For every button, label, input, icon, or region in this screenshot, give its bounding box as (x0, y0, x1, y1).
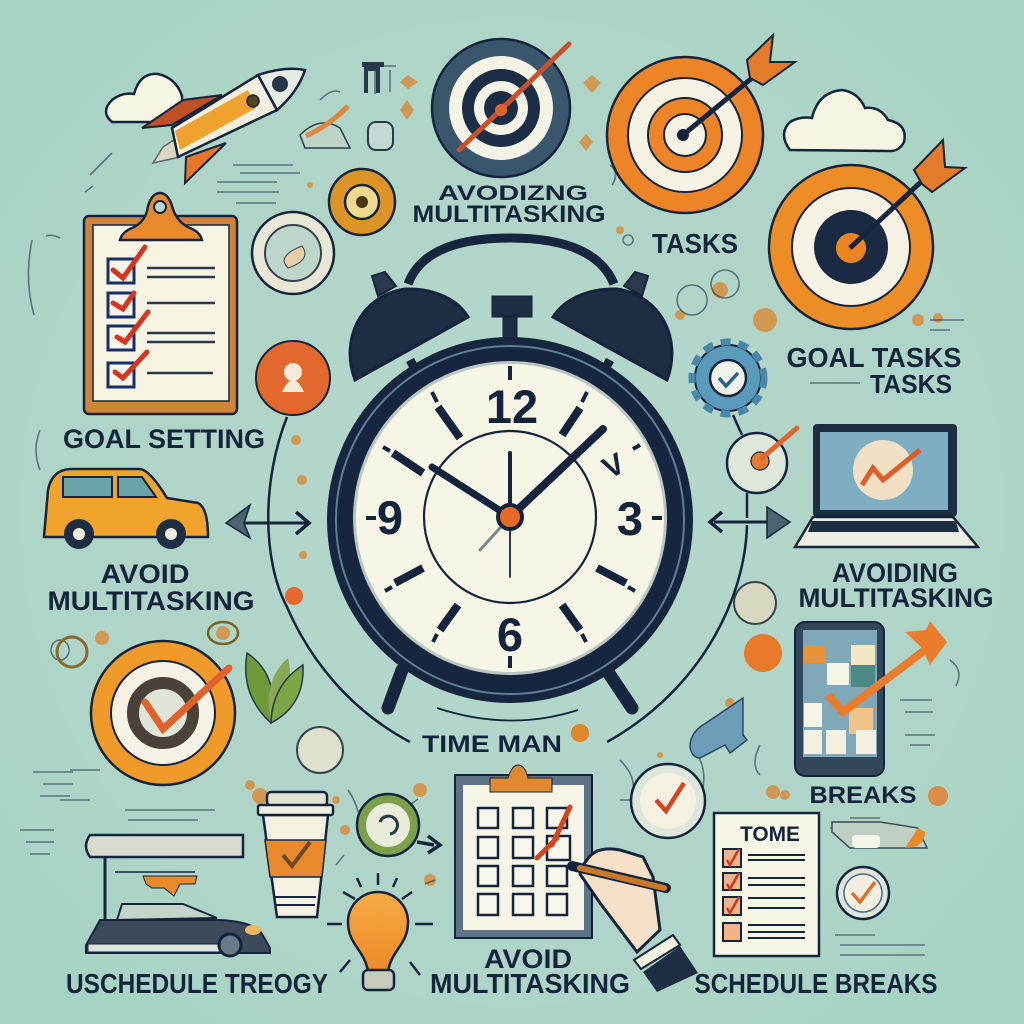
rocket exhaust (153, 138, 180, 163)
small check medallion (837, 867, 889, 919)
clock numerals (377, 380, 643, 661)
clock numerals: V (597, 447, 630, 486)
clock hands (432, 429, 603, 577)
check badge (631, 764, 705, 838)
phone with arrow (795, 621, 947, 776)
small zero badge (368, 122, 393, 150)
rocket nose (258, 69, 305, 110)
rocket top fin (142, 95, 222, 128)
clock numerals: 6 (497, 608, 523, 661)
double arrow right (710, 507, 790, 538)
heading: goal tasks: TASKS (870, 369, 952, 399)
heading: avoiding multitasking: AVODIZNG (438, 182, 588, 205)
heading: avoiding multitasking right: MULTITASKING (798, 583, 994, 613)
alarm clock (327, 238, 693, 708)
clock top button (492, 296, 532, 342)
heading: goal tasks: GOAL TASKS (786, 342, 962, 373)
arrow tool icon (690, 698, 747, 758)
target: goal tasks (769, 140, 965, 329)
heading: avoid multitasking bottom: AVOID (484, 944, 572, 974)
heading: avoid multitasking bottom (430, 944, 630, 999)
heading: avoid multitasking bottom: MULTITASKING (430, 968, 630, 999)
clock body (327, 337, 693, 703)
heading: schedule breaks: SCHEDULE BREAKS (694, 968, 938, 999)
clock numerals: 12 (486, 380, 538, 433)
heading: avoiding multitasking right: AVOIDING (832, 558, 958, 588)
gear check badge (692, 342, 764, 414)
small machine doodle (832, 822, 927, 848)
heading: avoiding multitasking: MULTITASKING (412, 201, 606, 228)
clock bell knobs (372, 272, 648, 296)
heading: avoid multitasking left: MULTITASKING (48, 586, 254, 616)
rocket orange band (175, 90, 256, 150)
clock handle (408, 238, 614, 284)
light bulb (327, 873, 433, 990)
heading: goal tasks (786, 342, 962, 399)
orbit ring around clock (268, 415, 747, 742)
rocket (142, 69, 305, 183)
laptop (795, 424, 978, 547)
small gauge (297, 727, 343, 773)
cloud right (784, 90, 905, 151)
car and stand (86, 835, 270, 956)
heading: avoid multitasking left (48, 559, 254, 616)
mound with orange swoosh (300, 87, 350, 148)
coffee cup (258, 792, 333, 917)
cloud left (106, 74, 182, 122)
clock numerals: 9 (377, 491, 403, 544)
heading: avoid multitasking left: AVOID (100, 559, 190, 589)
small arrow to calendar (417, 836, 440, 853)
orange pin and small badges (57, 582, 782, 742)
heading: time management: TIME MAN (422, 731, 562, 758)
checklist document: tome (714, 813, 819, 956)
gauge with orange check (727, 428, 797, 493)
decorative doodles (95, 75, 948, 886)
calendar clipboard (455, 765, 592, 938)
target: avoiding multitasking (432, 39, 570, 177)
small clock medallion (252, 212, 334, 294)
rocket body (172, 75, 277, 157)
top stool doodle (362, 62, 384, 93)
orange eye badge (329, 169, 395, 235)
hand with pen (572, 849, 698, 992)
car (44, 469, 208, 549)
target with checkmark (91, 641, 235, 785)
clock bells (350, 289, 672, 380)
heading: avoiding multitasking right (798, 558, 994, 613)
heading: tasks: TASKS (652, 228, 738, 259)
orange profile badge (256, 341, 330, 415)
rocket bottom fin (185, 143, 226, 183)
clipboard: goal setting checklist (84, 193, 237, 414)
checklist document: tome: TOME (740, 823, 800, 846)
heading: avoiding multitasking (412, 182, 606, 228)
heading: schedule strategy: USCHEDULE TREOGY (66, 968, 328, 999)
heading: goal setting: GOAL SETTING (63, 424, 265, 454)
double arrow left (226, 505, 309, 538)
clock feet (388, 670, 632, 708)
clock numerals: 3 (617, 492, 643, 545)
target: tasks (607, 35, 795, 213)
green leaves (246, 653, 303, 723)
clock ticks (393, 407, 626, 630)
green swirl badge (357, 794, 419, 856)
heading: breaks: BREAKS (810, 782, 916, 809)
